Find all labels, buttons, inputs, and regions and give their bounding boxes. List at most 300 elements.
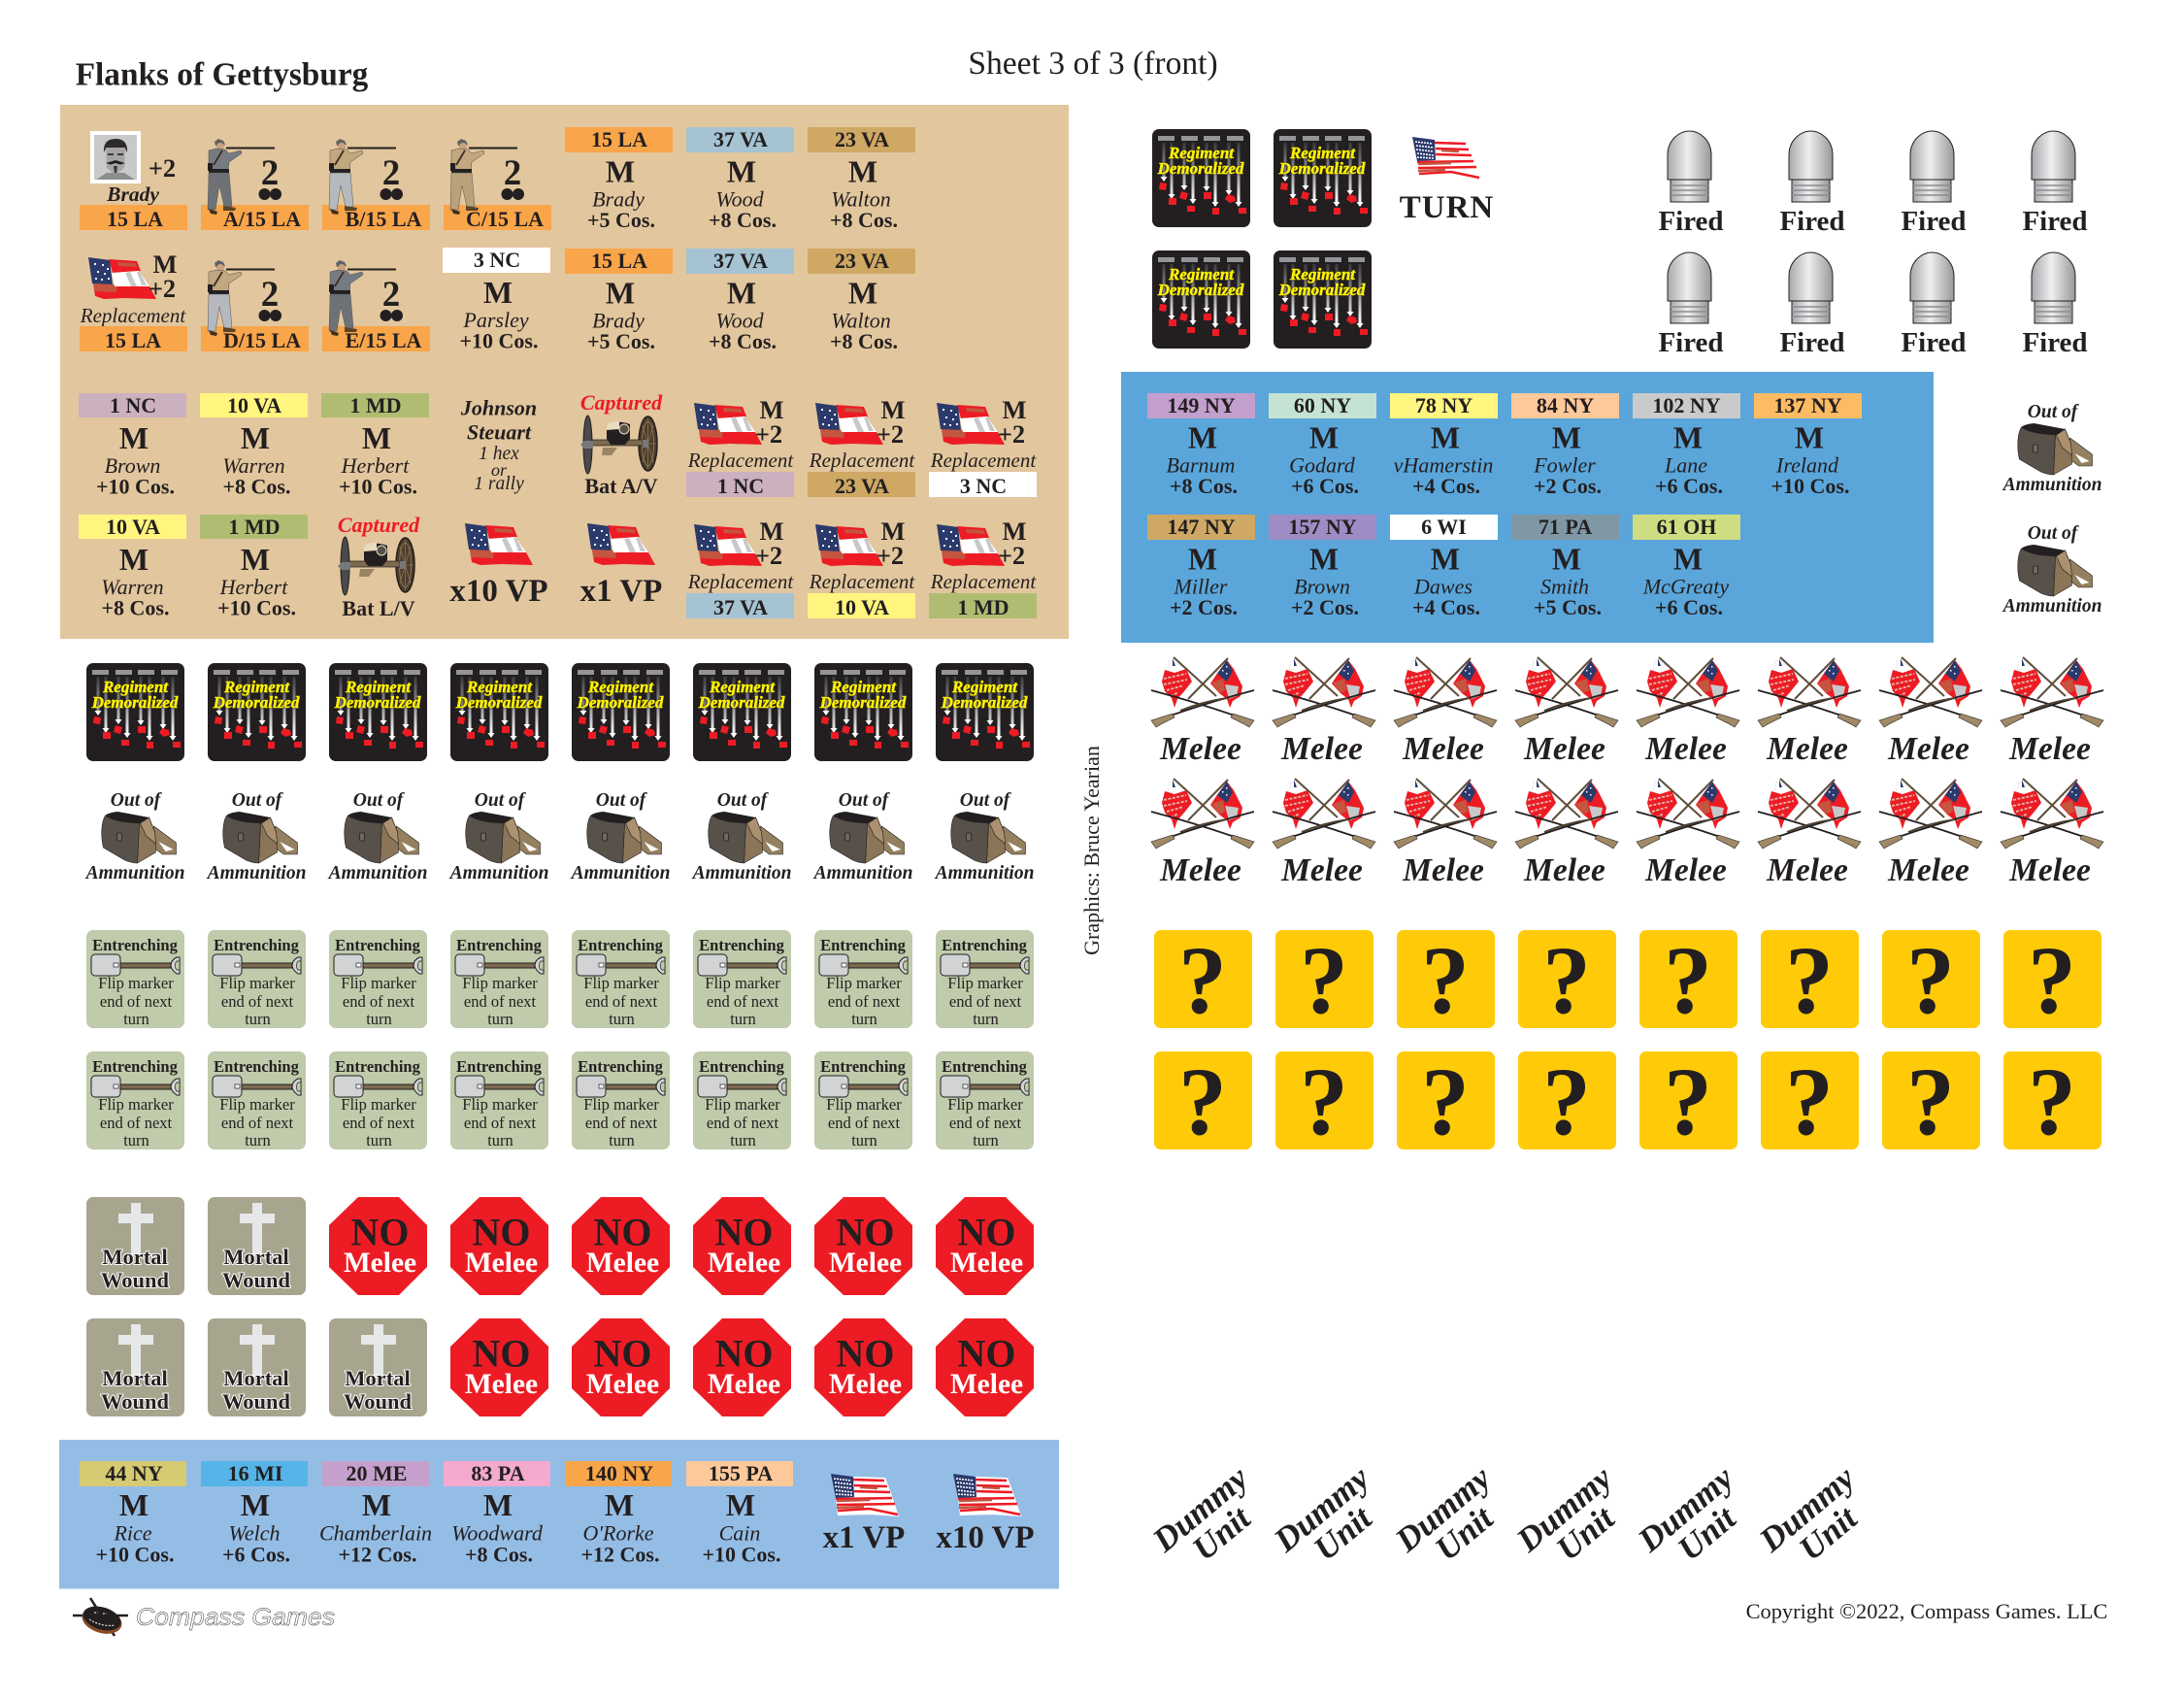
group: fired bullets — [1658, 131, 2088, 358]
marker: fired r2c1 — [1658, 252, 1724, 358]
counter: 3 NC replacement: M — [1002, 395, 1027, 424]
counter: 137 NY Ireland: 137 NY — [1773, 393, 1842, 417]
counter: 6 WI Dawes — [1390, 515, 1498, 619]
counter: 16 MI Welch: M — [241, 1487, 270, 1522]
counter: 3 NC Parsley: +10 Cos. — [460, 328, 538, 353]
counter: 15 LA Brady: Brady — [592, 309, 645, 332]
counter: 60 NY Godard: 60 NY — [1294, 393, 1351, 417]
counter: 149 NY Barnum: +8 Cos. — [1170, 474, 1238, 498]
counter: 37 VA Wood: M — [727, 276, 756, 311]
marker: out of ammunition right 1: Ammunition — [2002, 475, 2101, 495]
marker: entrenching r1c5: Entrenching — [578, 936, 664, 954]
marker: out of ammunition right 2: Ammunition — [2002, 596, 2101, 616]
marker: entrenching r2c2: Entrenching — [214, 1057, 300, 1076]
counter: Captured battery L/V — [338, 513, 420, 620]
counter: E/15 LA infantry — [322, 260, 430, 352]
marker: entrenching r1c7: turn — [851, 1010, 877, 1028]
marker: entrenching r2c1: Flip marker — [98, 1095, 174, 1114]
counter: 1 MD Herbert: 1 MD — [349, 393, 402, 417]
counter: 23 VA Walton: Walton — [831, 186, 891, 212]
counter: Johnson Steuart: 1 rally — [474, 474, 524, 494]
marker: out of ammunition right 1: Out of — [2028, 402, 2080, 422]
marker: regiment demoralized 2: Regiment — [223, 678, 290, 696]
marker: fired r2c3: Fired — [1901, 327, 1967, 358]
marker: regiment demoralized 6: Regiment — [709, 678, 776, 696]
counter: 10 VA Warren: 10 VA — [227, 393, 281, 417]
marker: out of ammunition 5: Ammunition — [570, 863, 670, 883]
marker: melee r2c4 — [1515, 779, 1618, 888]
counter: 140 NY O'Rorke: O'Rorke — [582, 1520, 654, 1546]
marker: no melee r2c4: Melee — [465, 1369, 538, 1400]
counter: 1 MD Herbert: Herbert — [219, 575, 288, 599]
counter: 37 VA replacement: +2 — [755, 541, 782, 570]
marker: dummy unit 3: Unit — [1428, 1498, 1501, 1568]
counter: 6 WI Dawes: +4 Cos. — [1412, 595, 1480, 619]
marker: no melee r1c5 — [572, 1197, 670, 1295]
counter: 1 MD Herbert: +10 Cos. — [217, 596, 296, 619]
counter: 147 NY Miller — [1147, 515, 1255, 619]
marker: no melee r1c7: NO — [837, 1210, 895, 1254]
marker: melee r1c4 — [1515, 657, 1618, 767]
counter: 1 MD Herbert: 1 MD — [228, 515, 281, 539]
counter: 84 NY Fowler: Fowler — [1533, 452, 1596, 478]
counter: Captured battery L/V: Captured — [338, 513, 420, 537]
counter: Brady leader: Brady — [106, 183, 159, 206]
marker: melee r1c1: Melee — [1159, 731, 1241, 767]
marker: entrenching r1c1: turn — [123, 1010, 149, 1028]
marker: melee r2c5 — [1637, 779, 1739, 888]
marker: entrenching r2c8: turn — [973, 1131, 999, 1149]
counter: C/15 LA infantry: C/15 LA — [466, 207, 544, 231]
marker: melee r1c1 — [1151, 657, 1254, 767]
counter: 147 NY Miller: Miller — [1173, 575, 1228, 598]
marker: fired r1c3 — [1901, 131, 1967, 237]
marker: question r2c5 — [1639, 1048, 1737, 1155]
counter: 61 OH McGreaty: McGreaty — [1642, 575, 1729, 598]
marker: dummy unit 1: Unit — [1185, 1498, 1258, 1568]
marker: question r1c7: ? — [1906, 926, 1955, 1034]
counter: 1 MD Herbert — [200, 515, 308, 619]
marker: out of ammunition 3: Ammunition — [327, 863, 427, 883]
marker: entrenching r2c8: end of next — [949, 1114, 1022, 1132]
marker: melee r1c3: Melee — [1402, 731, 1484, 767]
marker: entrenching r1c2: Flip marker — [219, 974, 295, 992]
marker: fired r2c4 — [2022, 252, 2088, 358]
marker: out of ammunition 4 — [448, 790, 548, 883]
counter: 1 MD replacement: 1 MD — [957, 595, 1009, 619]
counter: 23 VA replacement — [808, 395, 915, 498]
counter: 6 WI Dawes: Dawes — [1413, 575, 1473, 598]
marker: melee r2c8 — [2001, 779, 2103, 888]
counter: 1 NC replacement: Replacement — [687, 449, 794, 472]
marker: mortal wound r1c1: Mortal — [102, 1245, 168, 1269]
counter: 3 NC replacement: +2 — [998, 419, 1025, 449]
marker: mortal wound r2c2: Wound — [222, 1389, 291, 1414]
marker: mortal wound r1c1 — [86, 1197, 184, 1295]
group: melee markers — [1151, 657, 2103, 888]
marker: melee r2c1: Melee — [1159, 852, 1241, 888]
counter: 149 NY Barnum: Barnum — [1167, 452, 1235, 478]
marker: no melee r2c4: NO — [472, 1332, 530, 1375]
marker: entrenching r1c3: Entrenching — [335, 936, 421, 954]
marker: entrenching r2c5: end of next — [585, 1114, 658, 1132]
marker: mortal wound r1c2 — [208, 1197, 306, 1295]
counter: 147 NY Miller: +2 Cos. — [1170, 595, 1238, 619]
marker: regiment demoralized right 3: Regiment — [1168, 265, 1235, 283]
marker: out of ammunition 7: Out of — [839, 790, 891, 811]
marker: entrenching r1c7: end of next — [828, 992, 901, 1011]
marker: regiment demoralized 3: Regiment — [345, 678, 412, 696]
counter: 15 LA Brady: Brady — [592, 186, 645, 212]
counter: C/15 LA infantry — [444, 139, 551, 231]
credit: graphics: Graphics: Bruce Yearian — [1079, 746, 1104, 955]
counter: Johnson Steuart: Steuart — [467, 419, 532, 445]
counter: 37 VA Wood: 37 VA — [713, 127, 768, 151]
marker: entrenching r1c1: Flip marker — [98, 974, 174, 992]
counter: 23 VA replacement: +2 — [877, 419, 904, 449]
marker: regiment demoralized 1: Regiment — [102, 678, 169, 696]
panel: light blue Union counters — [59, 1440, 1059, 1588]
marker: entrenching r2c7: end of next — [828, 1114, 901, 1132]
marker: regiment demoralized 1 — [86, 663, 184, 761]
copyright: Copyright ©2022, Compass Games. LLC — [1746, 1599, 2107, 1623]
marker: question r2c3 — [1397, 1048, 1495, 1155]
marker: question r2c6 — [1761, 1048, 1859, 1155]
counter: 37 VA Wood: M — [727, 153, 756, 188]
marker: no melee r1c8 — [936, 1197, 1034, 1295]
marker: no melee r1c3: NO — [351, 1210, 410, 1254]
marker: regiment demoralized 5: Regiment — [587, 678, 654, 696]
marker: entrenching r2c7: turn — [851, 1131, 877, 1149]
marker: question r2c8 — [2003, 1048, 2101, 1155]
counter: Johnson Steuart: Johnson — [460, 396, 537, 419]
counter: 102 NY Lane — [1633, 393, 1740, 498]
counter: 1 MD Herbert: +10 Cos. — [339, 474, 417, 499]
marker: melee r2c6 — [1758, 779, 1861, 888]
marker: entrenching r1c2: turn — [245, 1010, 271, 1028]
marker: question r1c2 — [1275, 926, 1373, 1034]
counter: 23 VA Walton: +8 Cos. — [830, 208, 898, 232]
marker: entrenching r2c1: Entrenching — [92, 1057, 179, 1076]
marker: out of ammunition right 1 — [2002, 402, 2101, 495]
counter: 78 NY vHamerstin: 78 NY — [1415, 393, 1473, 417]
counter: 6 WI Dawes: M — [1431, 542, 1460, 577]
marker: mortal wound r2c3: Mortal — [345, 1366, 411, 1390]
group: mortal wound and no melee markers — [86, 1197, 1034, 1416]
counter: 60 NY Godard: M — [1309, 419, 1339, 454]
marker: melee r2c2 — [1273, 779, 1375, 888]
marker: regiment demoralized right 1: Demoralized — [1157, 159, 1244, 178]
marker: out of ammunition right 2: Out of — [2028, 523, 2080, 544]
counter: Union x1 VP: x1 VP — [823, 1520, 905, 1555]
marker: no melee r1c7 — [814, 1197, 912, 1295]
marker: no melee r2c8: NO — [957, 1332, 1015, 1375]
counter: 71 PA Smith: M — [1552, 542, 1581, 577]
counter: 23 VA replacement: M — [880, 395, 906, 424]
counter: 23 VA Walton: +8 Cos. — [830, 329, 898, 353]
counter: 60 NY Godard — [1269, 393, 1376, 498]
marker: question r2c2 — [1275, 1048, 1373, 1155]
marker: no melee r2c5: Melee — [586, 1369, 659, 1400]
marker: question r1c5 — [1639, 926, 1737, 1034]
counter: 15 LA replacement: Replacement — [80, 304, 186, 327]
counter: 15 LA Brady: M — [606, 153, 635, 188]
marker: entrenching r2c3: Entrenching — [335, 1057, 421, 1076]
marker: entrenching r1c2: Entrenching — [214, 936, 300, 954]
counter: 23 VA Walton: 23 VA — [835, 127, 889, 151]
marker: question r1c5: ? — [1664, 926, 1712, 1034]
counter: 155 PA Cain: Cain — [719, 1520, 760, 1546]
marker: mortal wound r2c2 — [208, 1318, 306, 1416]
counter: 16 MI Welch: 16 MI — [228, 1461, 282, 1485]
counter: 71 PA Smith: 71 PA — [1539, 515, 1592, 539]
marker: out of ammunition 8: Out of — [960, 790, 1012, 811]
counter: 3 NC Parsley: 3 NC — [474, 248, 520, 272]
counter: 16 MI Welch: +6 Cos. — [222, 1542, 290, 1567]
marker: entrenching r1c6 — [693, 930, 791, 1028]
marker: entrenching r2c6 — [693, 1051, 791, 1149]
marker: regiment demoralized 2: Demoralized — [213, 693, 300, 712]
marker: question r1c6: ? — [1785, 926, 1834, 1034]
marker: mortal wound r2c1: Mortal — [102, 1366, 168, 1390]
counter: 71 PA Smith: Smith — [1540, 575, 1589, 598]
group: question mark markers — [1154, 926, 2101, 1155]
counter: 15 LA replacement: 15 LA — [105, 328, 161, 352]
marker: no melee r1c4: NO — [472, 1210, 530, 1254]
marker: mortal wound r2c1: Wound — [101, 1389, 170, 1414]
marker: entrenching r1c6: Entrenching — [699, 936, 785, 954]
marker: melee r1c5 — [1637, 657, 1739, 767]
marker: no melee r1c7: Melee — [829, 1248, 902, 1279]
marker: question r2c1 — [1154, 1048, 1252, 1155]
counter: 1 MD Herbert: Herbert — [341, 453, 410, 478]
marker: mortal wound r1c2: Mortal — [223, 1245, 289, 1269]
counter: 23 VA Walton: M — [848, 276, 877, 311]
counter: 44 NY Rice: Rice — [113, 1520, 152, 1546]
group: regiment demoralized row left — [86, 663, 1034, 761]
counter: 10 VA Warren: Warren — [222, 453, 285, 478]
counter: B/15 LA infantry: 2 — [382, 153, 400, 193]
counter: 149 NY Barnum: M — [1188, 419, 1217, 454]
marker: entrenching r2c3 — [329, 1051, 427, 1149]
counter: 10 VA replacement: +2 — [877, 541, 904, 570]
marker: regiment demoralized 1: Demoralized — [91, 693, 179, 712]
marker: fired r1c1 — [1658, 131, 1724, 237]
marker: no melee r1c5: NO — [594, 1210, 652, 1254]
marker: out of ammunition 7 — [812, 790, 912, 883]
counter: 84 NY Fowler — [1511, 393, 1619, 498]
group: dummy unit markers — [1144, 1458, 1865, 1568]
marker: entrenching r1c2: end of next — [221, 992, 294, 1011]
marker: entrenching r1c4: Flip marker — [462, 974, 538, 992]
marker: melee r1c3 — [1394, 657, 1497, 767]
counter: 37 VA Wood: Wood — [715, 186, 765, 212]
counter: 137 NY Ireland: M — [1795, 419, 1824, 454]
marker: melee r2c1 — [1151, 779, 1254, 888]
counter: 15 LA Brady: 15 LA — [591, 249, 647, 273]
counter: 15 LA replacement: +2 — [149, 274, 176, 303]
counter: 140 NY O'Rorke — [565, 1461, 672, 1567]
marker: question r2c7: ? — [1906, 1048, 1955, 1155]
marker: regiment demoralized 4 — [450, 663, 548, 761]
counter: 84 NY Fowler: M — [1552, 419, 1581, 454]
counter: 1 MD replacement — [929, 516, 1037, 619]
counter: 78 NY vHamerstin: M — [1431, 419, 1460, 454]
marker: Turn: TURN — [1400, 190, 1494, 225]
marker: question r2c4: ? — [1542, 1048, 1591, 1155]
marker: melee r2c3: Melee — [1402, 852, 1484, 888]
counter: Captured battery A/V: Captured — [580, 390, 663, 415]
marker: no melee r2c4 — [450, 1318, 548, 1416]
group: out of ammunition row left — [84, 790, 1034, 883]
marker: regiment demoralized 4: Demoralized — [455, 693, 543, 712]
marker: entrenching r1c8: end of next — [949, 992, 1022, 1011]
logo: Compass Games turtle — [73, 1598, 335, 1639]
counter: 1 NC Brown: Brown — [105, 453, 160, 478]
counter: 15 LA Brady: +5 Cos. — [587, 208, 655, 232]
marker: entrenching r2c7: Entrenching — [820, 1057, 907, 1076]
marker: entrenching r2c3: turn — [366, 1131, 392, 1149]
counter: 1 NC replacement: 1 NC — [717, 474, 764, 498]
marker: mortal wound r2c1 — [86, 1318, 184, 1416]
marker: no melee r1c4: Melee — [465, 1248, 538, 1279]
marker: regiment demoralized right 3 — [1152, 250, 1250, 349]
marker: regiment demoralized 7: Regiment — [830, 678, 897, 696]
counter: 20 ME Chamberlain: 20 ME — [347, 1461, 407, 1485]
marker: regiment demoralized 5: Demoralized — [577, 693, 664, 712]
marker: melee r1c6 — [1758, 657, 1861, 767]
marker: no melee r1c5: Melee — [586, 1248, 659, 1279]
marker: out of ammunition 6: Out of — [717, 790, 770, 811]
marker: dummy unit 4: Unit — [1549, 1498, 1622, 1568]
marker: dummy unit 6: Unit — [1792, 1498, 1865, 1568]
marker: no melee r1c3: Melee — [344, 1248, 416, 1279]
marker: regiment demoralized right 2: Regiment — [1289, 144, 1356, 162]
marker: fired r1c3: Fired — [1901, 206, 1967, 237]
counter: 83 PA Woodward: 83 PA — [471, 1461, 525, 1485]
counter: 155 PA Cain: +10 Cos. — [703, 1542, 780, 1567]
marker: melee r2c5: Melee — [1644, 852, 1727, 888]
marker: dummy unit 4: Dummy — [1508, 1458, 1619, 1560]
marker: out of ammunition 2 — [206, 790, 306, 883]
counter: 102 NY Lane: M — [1673, 419, 1703, 454]
counter: D/15 LA infantry: 2 — [261, 275, 279, 315]
counter: 10 VA Warren: Warren — [101, 575, 164, 599]
marker: entrenching r1c4: end of next — [464, 992, 537, 1011]
counter: Union x10 VP: x10 VP — [936, 1520, 1035, 1555]
counter: x10 VP: x10 VP — [449, 574, 548, 609]
marker: entrenching r2c6: end of next — [707, 1114, 779, 1132]
marker: entrenching r2c5: Flip marker — [583, 1095, 659, 1114]
marker: entrenching r2c5: Entrenching — [578, 1057, 664, 1076]
marker: out of ammunition 1: Out of — [111, 790, 163, 811]
marker: entrenching r1c6: Flip marker — [705, 974, 780, 992]
marker: out of ammunition 7: Ammunition — [812, 863, 912, 883]
counter: 140 NY O'Rorke: M — [605, 1487, 634, 1522]
marker: entrenching r2c1: end of next — [100, 1114, 173, 1132]
marker: regiment demoralized right 4: Regiment — [1289, 265, 1356, 283]
marker: regiment demoralized right 2 — [1274, 129, 1372, 227]
counter: 71 PA Smith: +5 Cos. — [1534, 595, 1602, 619]
sheet heading: Sheet 3 of 3 (front) — [968, 46, 1218, 82]
marker: regiment demoralized 3: Demoralized — [334, 693, 421, 712]
counter: 10 VA Warren — [200, 393, 308, 499]
marker: out of ammunition 4: Out of — [475, 790, 527, 811]
counter: 10 VA replacement: 10 VA — [835, 595, 889, 619]
marker: regiment demoralized 8: Demoralized — [941, 693, 1028, 712]
counter: 10 VA replacement: Replacement — [809, 570, 915, 593]
counter: Johnson Steuart — [460, 396, 537, 494]
counter: 155 PA Cain — [686, 1461, 793, 1567]
counter: Brady leader — [80, 131, 187, 231]
counter: 157 NY Brown — [1269, 515, 1376, 619]
counter: 140 NY O'Rorke: +12 Cos. — [580, 1542, 660, 1567]
counter: 20 ME Chamberlain: Chamberlain — [319, 1520, 432, 1546]
marker: question r2c1: ? — [1178, 1048, 1227, 1155]
counter: 10 VA Warren: +8 Cos. — [101, 596, 169, 619]
counter: Johnson Steuart: or — [491, 460, 508, 480]
counter: 78 NY vHamerstin: vHamerstin — [1394, 452, 1493, 478]
marker: question r1c4 — [1518, 926, 1616, 1034]
marker: melee r1c2: Melee — [1280, 731, 1363, 767]
counter: 102 NY Lane: 102 NY — [1652, 393, 1721, 417]
counter: 102 NY Lane: Lane — [1664, 452, 1707, 478]
counter: Captured battery A/V — [580, 390, 663, 498]
marker: no melee r2c7 — [814, 1318, 912, 1416]
marker: regiment demoralized right 2: Demoralized — [1278, 159, 1366, 178]
marker: no melee r2c7: Melee — [829, 1369, 902, 1400]
marker: entrenching r1c4 — [450, 930, 548, 1028]
marker: entrenching r2c6: Entrenching — [699, 1057, 785, 1076]
marker: question r1c1 — [1154, 926, 1252, 1034]
marker: melee r2c2: Melee — [1280, 852, 1363, 888]
counter: 6 WI Dawes: 6 WI — [1421, 515, 1467, 539]
counter: 157 NY Brown: Brown — [1294, 575, 1350, 598]
counter: 84 NY Fowler: 84 NY — [1537, 393, 1594, 417]
marker: fired r2c2: Fired — [1779, 327, 1845, 358]
counter: 147 NY Miller: 147 NY — [1167, 515, 1236, 539]
counter: 23 VA Walton: 23 VA — [835, 249, 889, 273]
marker: entrenching r1c3 — [329, 930, 427, 1028]
marker: entrenching r2c4: Entrenching — [456, 1057, 543, 1076]
marker: out of ammunition right 2 — [2002, 523, 2101, 616]
marker: entrenching r2c8: Entrenching — [942, 1057, 1028, 1076]
counter: 16 MI Welch — [201, 1461, 308, 1567]
counter: 37 VA Wood: +8 Cos. — [709, 329, 777, 353]
marker: entrenching r1c4: turn — [487, 1010, 513, 1028]
marker: out of ammunition 2: Out of — [232, 790, 284, 811]
marker: fired r1c4: Fired — [2022, 206, 2088, 237]
marker: regiment demoralized 2 — [208, 663, 306, 761]
marker: regiment demoralized 8 — [936, 663, 1034, 761]
counter: 44 NY Rice — [80, 1461, 186, 1567]
counter: 37 VA Wood: 37 VA — [713, 249, 768, 273]
marker: out of ammunition 6 — [691, 790, 791, 883]
marker: question r1c8: ? — [2028, 926, 2076, 1034]
counter: 23 VA Walton: M — [848, 153, 877, 188]
counter: 3 NC replacement: 3 NC — [960, 474, 1007, 498]
counter: 1 NC Brown — [79, 393, 186, 499]
counter: 1 NC replacement — [686, 395, 794, 498]
marker: entrenching r1c8: Entrenching — [942, 936, 1028, 954]
marker: melee r2c8: Melee — [2008, 852, 2091, 888]
marker: out of ammunition 3: Out of — [353, 790, 406, 811]
counter: Johnson Steuart: 1 hex — [479, 444, 519, 464]
counter: 1 NC replacement: +2 — [755, 419, 782, 449]
counter: 16 MI Welch: Welch — [229, 1520, 280, 1546]
counter: D/15 LA infantry: D/15 LA — [223, 328, 301, 352]
marker: fired r2c3 — [1901, 252, 1967, 358]
